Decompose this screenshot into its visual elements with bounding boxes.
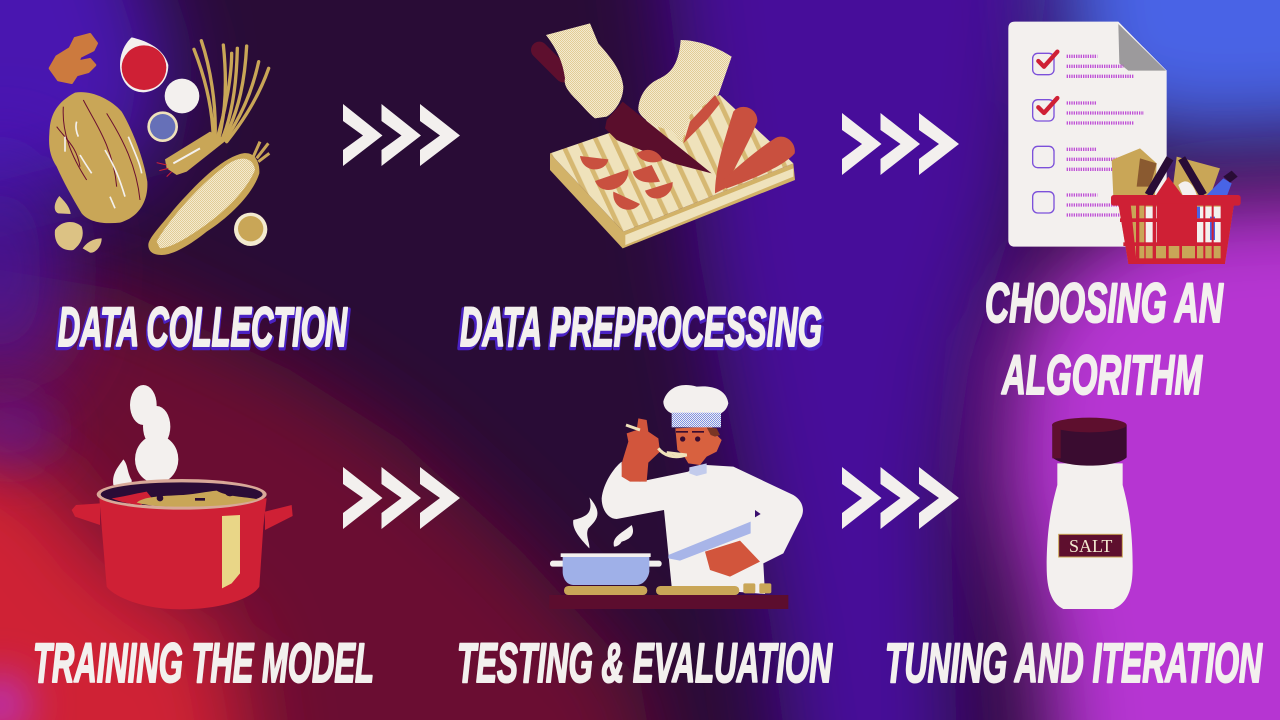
illustration: salt shaker [1047,418,1133,609]
heading: data preprocessing: DATA PREPROCESSING [460,295,822,358]
chef eyes [676,431,704,442]
steam right [614,525,633,547]
small slice on blade [637,150,663,162]
knife blade [605,102,712,173]
checkboxes [1033,53,1054,213]
paper [1008,22,1167,247]
heading: testing and evaluation: TESTING & EVALUATION [457,631,833,694]
icon: scallion [157,41,269,177]
right hand [638,40,732,143]
icon: ginger [50,34,97,83]
illustration: ingredients [49,34,269,255]
heading: training the model: TRAINING THE MODEL [33,631,374,694]
basket body [1111,195,1241,264]
icon: garlic [55,196,102,253]
left hand [546,23,623,118]
heading: choosing an algorithm [985,271,1224,406]
arrows 1 [343,104,460,166]
pot highlight [222,515,240,588]
pot rim [97,479,267,510]
saucepan [550,553,662,585]
bottle [1047,463,1133,609]
chef head [675,427,722,465]
salt label: SALT [1069,536,1112,556]
bottle cap [1052,418,1127,466]
icon: spice bowl [147,111,178,142]
cutting board [550,95,795,248]
carrot slices [580,156,673,210]
icon: fig [120,37,168,92]
heading: data collection: DATA COLLECTION [56,297,350,360]
towel band [668,522,751,561]
check marks [1038,52,1057,113]
heading: data preprocessing [458,295,824,360]
icon: cabbage [49,92,147,223]
arrows 2 [842,113,959,175]
list text lines [1067,56,1144,215]
paper fold [1118,24,1166,71]
illustration: chef tasting [549,385,803,609]
tasting hand [622,418,660,482]
big carrots [715,107,795,193]
heading: data preprocessing: DATA PREPROCESSING [458,297,824,360]
heading: data collection: DATA COLLECTION [58,295,348,358]
counter bars [564,583,771,595]
arrows 4 [842,467,959,529]
icon: white bowl [165,79,199,113]
pot handles [72,503,293,530]
pot interior [101,482,263,506]
basket groceries [1112,148,1238,197]
illustration: chopping [539,23,795,248]
arrows 3 [343,467,460,529]
illustration: cooking pot [72,385,293,609]
icon: radish [148,142,269,255]
carrot under hand [683,95,720,143]
knife handle [539,50,563,74]
lower hand [705,541,760,577]
chef collar [689,463,707,476]
basket handles [1148,158,1203,195]
counter [549,595,788,609]
soup [112,485,258,507]
spoon [626,425,687,457]
chef hat [663,385,728,413]
steam [113,385,178,487]
salt label [1059,534,1122,557]
icon: small sauce bowl [234,213,267,246]
armpit gap [755,510,761,517]
chef hair [707,427,720,437]
pot body [99,498,267,609]
heading: data collection [56,295,350,360]
hat band [672,413,721,427]
illustration: checklist and basket [1008,22,1241,264]
chef body [602,462,803,594]
steam left [573,497,597,548]
